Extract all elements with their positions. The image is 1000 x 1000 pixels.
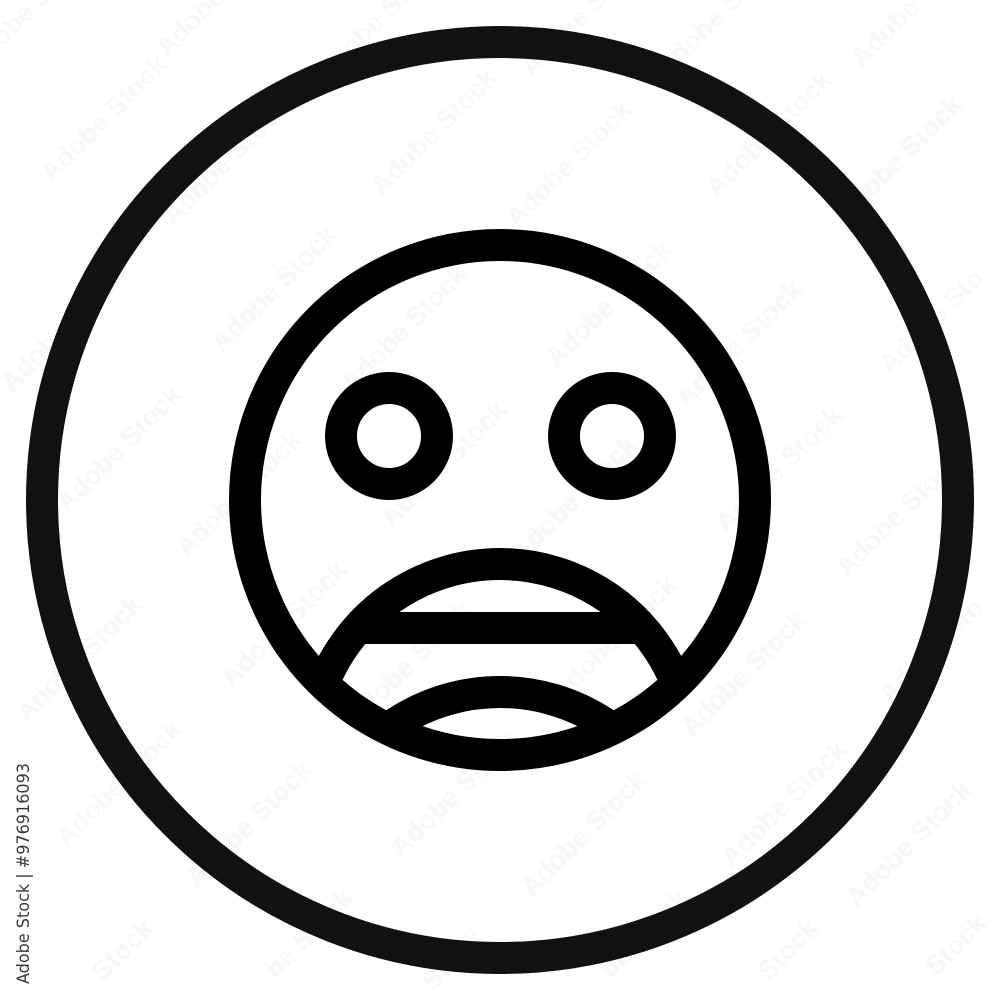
watermark pattern: Adobe Stock [50,379,188,518]
watermark pattern: Stock [751,912,825,986]
mouth bar [350,612,650,644]
watermark pattern: Adobe Stock [840,774,978,913]
watermark pattern: Adobe Stock [157,92,295,231]
watermark pattern: Adobe Stock [830,89,968,228]
watermark pattern: Adobe Sto [873,263,990,379]
watermark pattern: Adobe Stock [505,429,643,568]
right eye [564,388,660,484]
face outline [245,245,755,755]
watermark pattern: Adobe Stock [830,444,968,583]
watermark pattern: Adobe Stock [180,754,318,893]
watermark pattern: Stock [416,922,490,996]
watermark pattern: Adobe Stock [340,594,478,733]
watermark pattern: Adobe Stock [540,234,678,373]
left eye [341,388,437,484]
watermark pattern: be Stock [258,882,360,984]
watermark pattern: Adobe Stock [50,714,188,853]
watermark pattern: Adobe Stock [385,724,523,863]
watermark pattern: Adobe Stock [700,64,838,203]
lower arc [386,676,614,726]
watermark pattern: Adobe Stock [375,394,513,533]
open mouth [318,548,682,726]
icon: frightened face [245,245,755,808]
watermark pattern: Adobe Stock [670,274,808,413]
watermark pattern: Stock [86,912,160,986]
watermark pattern: Adobe Stock [215,554,353,693]
watermark pattern: Adobe Stock [35,49,173,188]
watermark pattern: Adobe Stock [365,62,503,201]
watermark pattern: Adobe Sto [873,593,990,709]
watermark pattern: Adobe Stock [335,259,473,398]
watermark pattern: Adobe Stock [205,219,343,358]
watermark pattern: Adobe Stock [545,569,683,708]
watermark pattern: Adobe Stock [675,604,813,743]
watermark pattern: Adobe Stock [500,94,638,233]
watermark pattern: Stock [919,907,993,981]
watermark pattern: be Stock [593,882,695,984]
watermark pattern: Adobe Stock [515,764,653,903]
watermark pattern: Adobe Stock [715,734,853,873]
upper lip arc [320,564,680,693]
watermark pattern: Adobe Stock [10,589,148,728]
watermark pattern: Adobe Stock [170,424,308,563]
stock id caption: Adobe Stock | #976916093 [14,763,34,984]
watermark pattern: Adobe Stock [710,399,848,538]
